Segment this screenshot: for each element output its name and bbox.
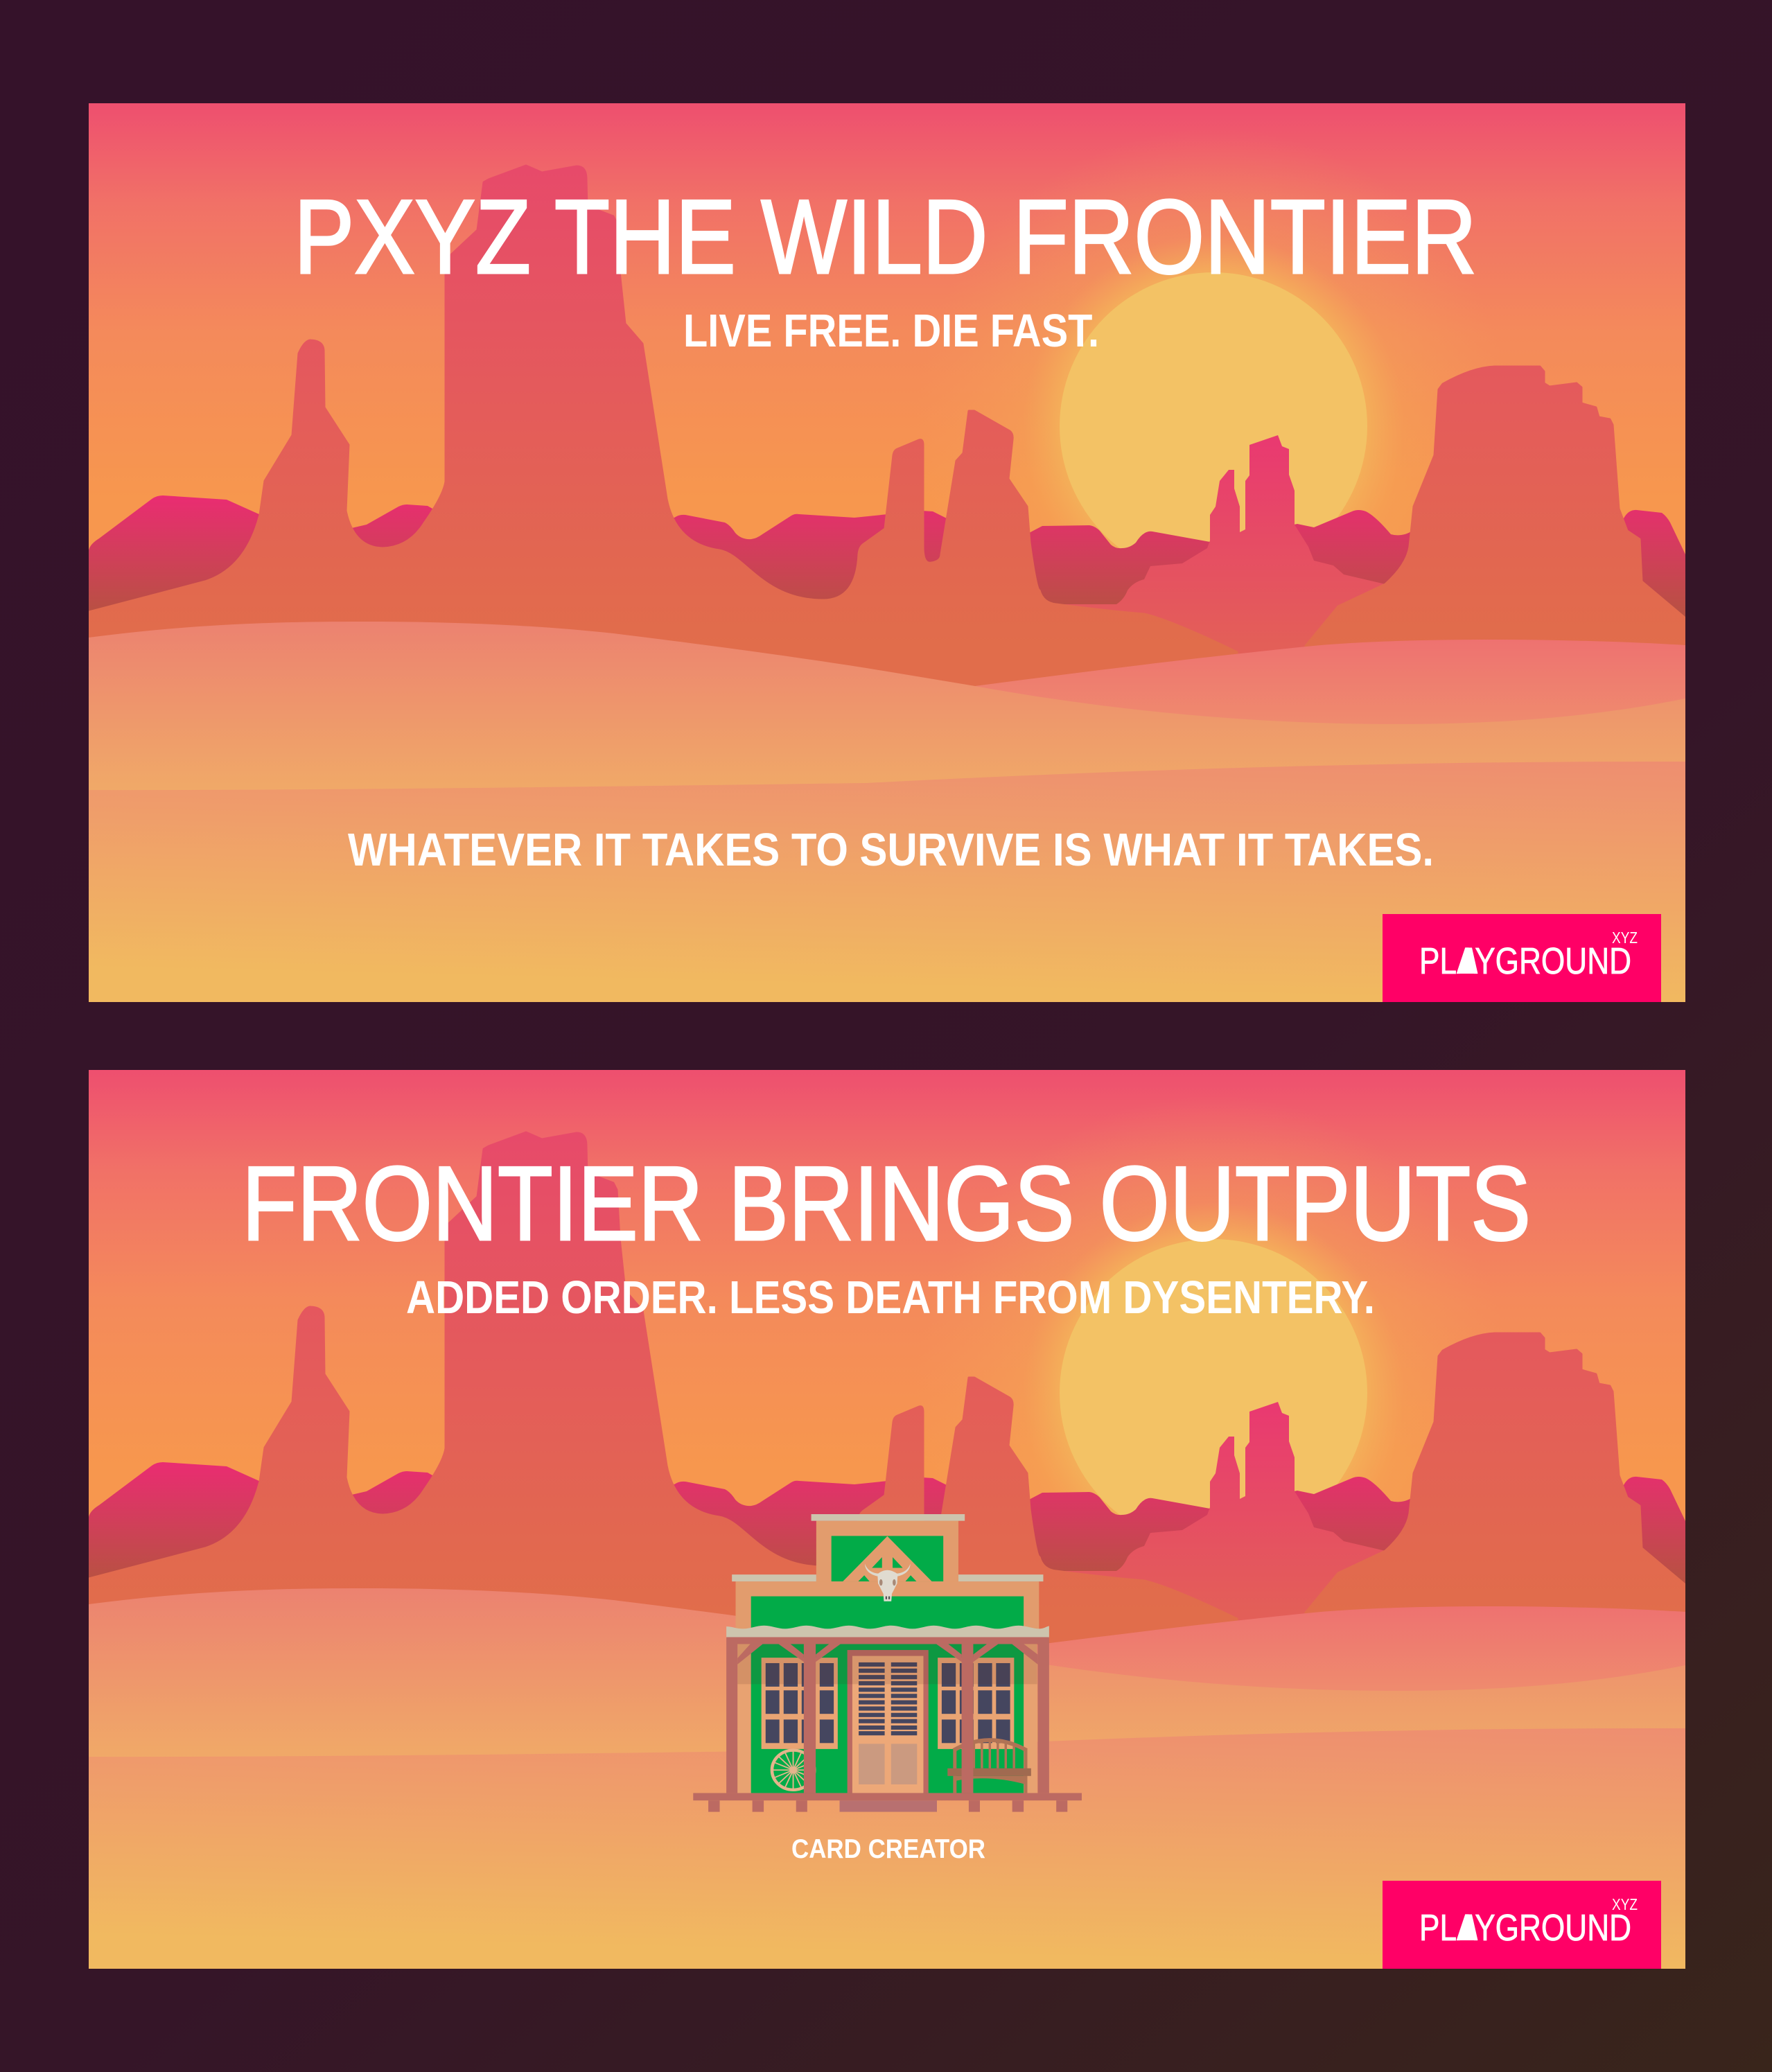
sky bbox=[89, 103, 1685, 554]
title: PXYZ THE WILD FRONTIER bbox=[294, 178, 1477, 296]
right window bbox=[938, 1658, 1014, 1749]
left window bbox=[762, 1658, 838, 1749]
title: FRONTIER BRINGS OUTPUTS bbox=[242, 1145, 1531, 1263]
boardwalk bbox=[693, 1793, 1082, 1812]
icon: cattle skull bbox=[865, 1563, 911, 1601]
door bbox=[848, 1650, 929, 1793]
central rock formation bbox=[1060, 1402, 1386, 1660]
panel: the wild frontier bbox=[89, 103, 1685, 1002]
tagline: WHATEVER IT TAKES TO SURVIVE IS WHAT IT TAKES. bbox=[348, 824, 1434, 876]
upper facade bbox=[812, 1514, 965, 1597]
foreground dune bbox=[89, 1728, 1685, 1969]
distant mesa range bbox=[89, 1462, 1685, 1632]
central rock formation bbox=[1064, 435, 1383, 654]
right mesa bbox=[1304, 366, 1685, 647]
logo: playground xyz: PLAYGROUND bbox=[1419, 940, 1631, 982]
panel: frontier brings outputs bbox=[89, 1070, 1685, 1969]
logo: playground xyz: XYZ bbox=[1612, 929, 1638, 947]
foreground dune bbox=[89, 762, 1685, 1002]
left mesas and tower bbox=[89, 165, 1238, 686]
logo: playground xyz: PLAYGROUND bbox=[1419, 1907, 1631, 1949]
porch shadow bbox=[737, 1644, 1037, 1684]
right dune bbox=[976, 640, 1685, 724]
sun bbox=[1017, 168, 1410, 549]
sun bbox=[915, 1095, 1511, 1691]
left mesas and tower bbox=[89, 1132, 1237, 1729]
left dune bbox=[89, 622, 1685, 832]
right dune bbox=[975, 1606, 1685, 1701]
porch posts and braces bbox=[726, 1637, 1049, 1793]
left dune bbox=[89, 1588, 1685, 1798]
subtitle: ADDED ORDER. LESS DEATH FROM DYSENTERY. bbox=[406, 1272, 1375, 1324]
logo: playground xyz: XYZ bbox=[1612, 1895, 1638, 1913]
subtitle: LIVE FREE. DIE FAST. bbox=[683, 305, 1099, 357]
bench bbox=[947, 1740, 1031, 1793]
sky bbox=[89, 1070, 1685, 1969]
distant mesa range bbox=[89, 495, 1685, 617]
illustration: card creator saloon bbox=[693, 1514, 1082, 1812]
right mesa bbox=[1306, 1333, 1685, 1660]
awning bbox=[726, 1626, 1049, 1638]
wagon wheel bbox=[772, 1750, 814, 1790]
illustration caption: CARD CREATOR bbox=[791, 1834, 985, 1864]
lower facade bbox=[732, 1574, 1043, 1793]
logo: playground xyz bbox=[1383, 1881, 1661, 1969]
logo: playground xyz bbox=[1383, 914, 1661, 1002]
